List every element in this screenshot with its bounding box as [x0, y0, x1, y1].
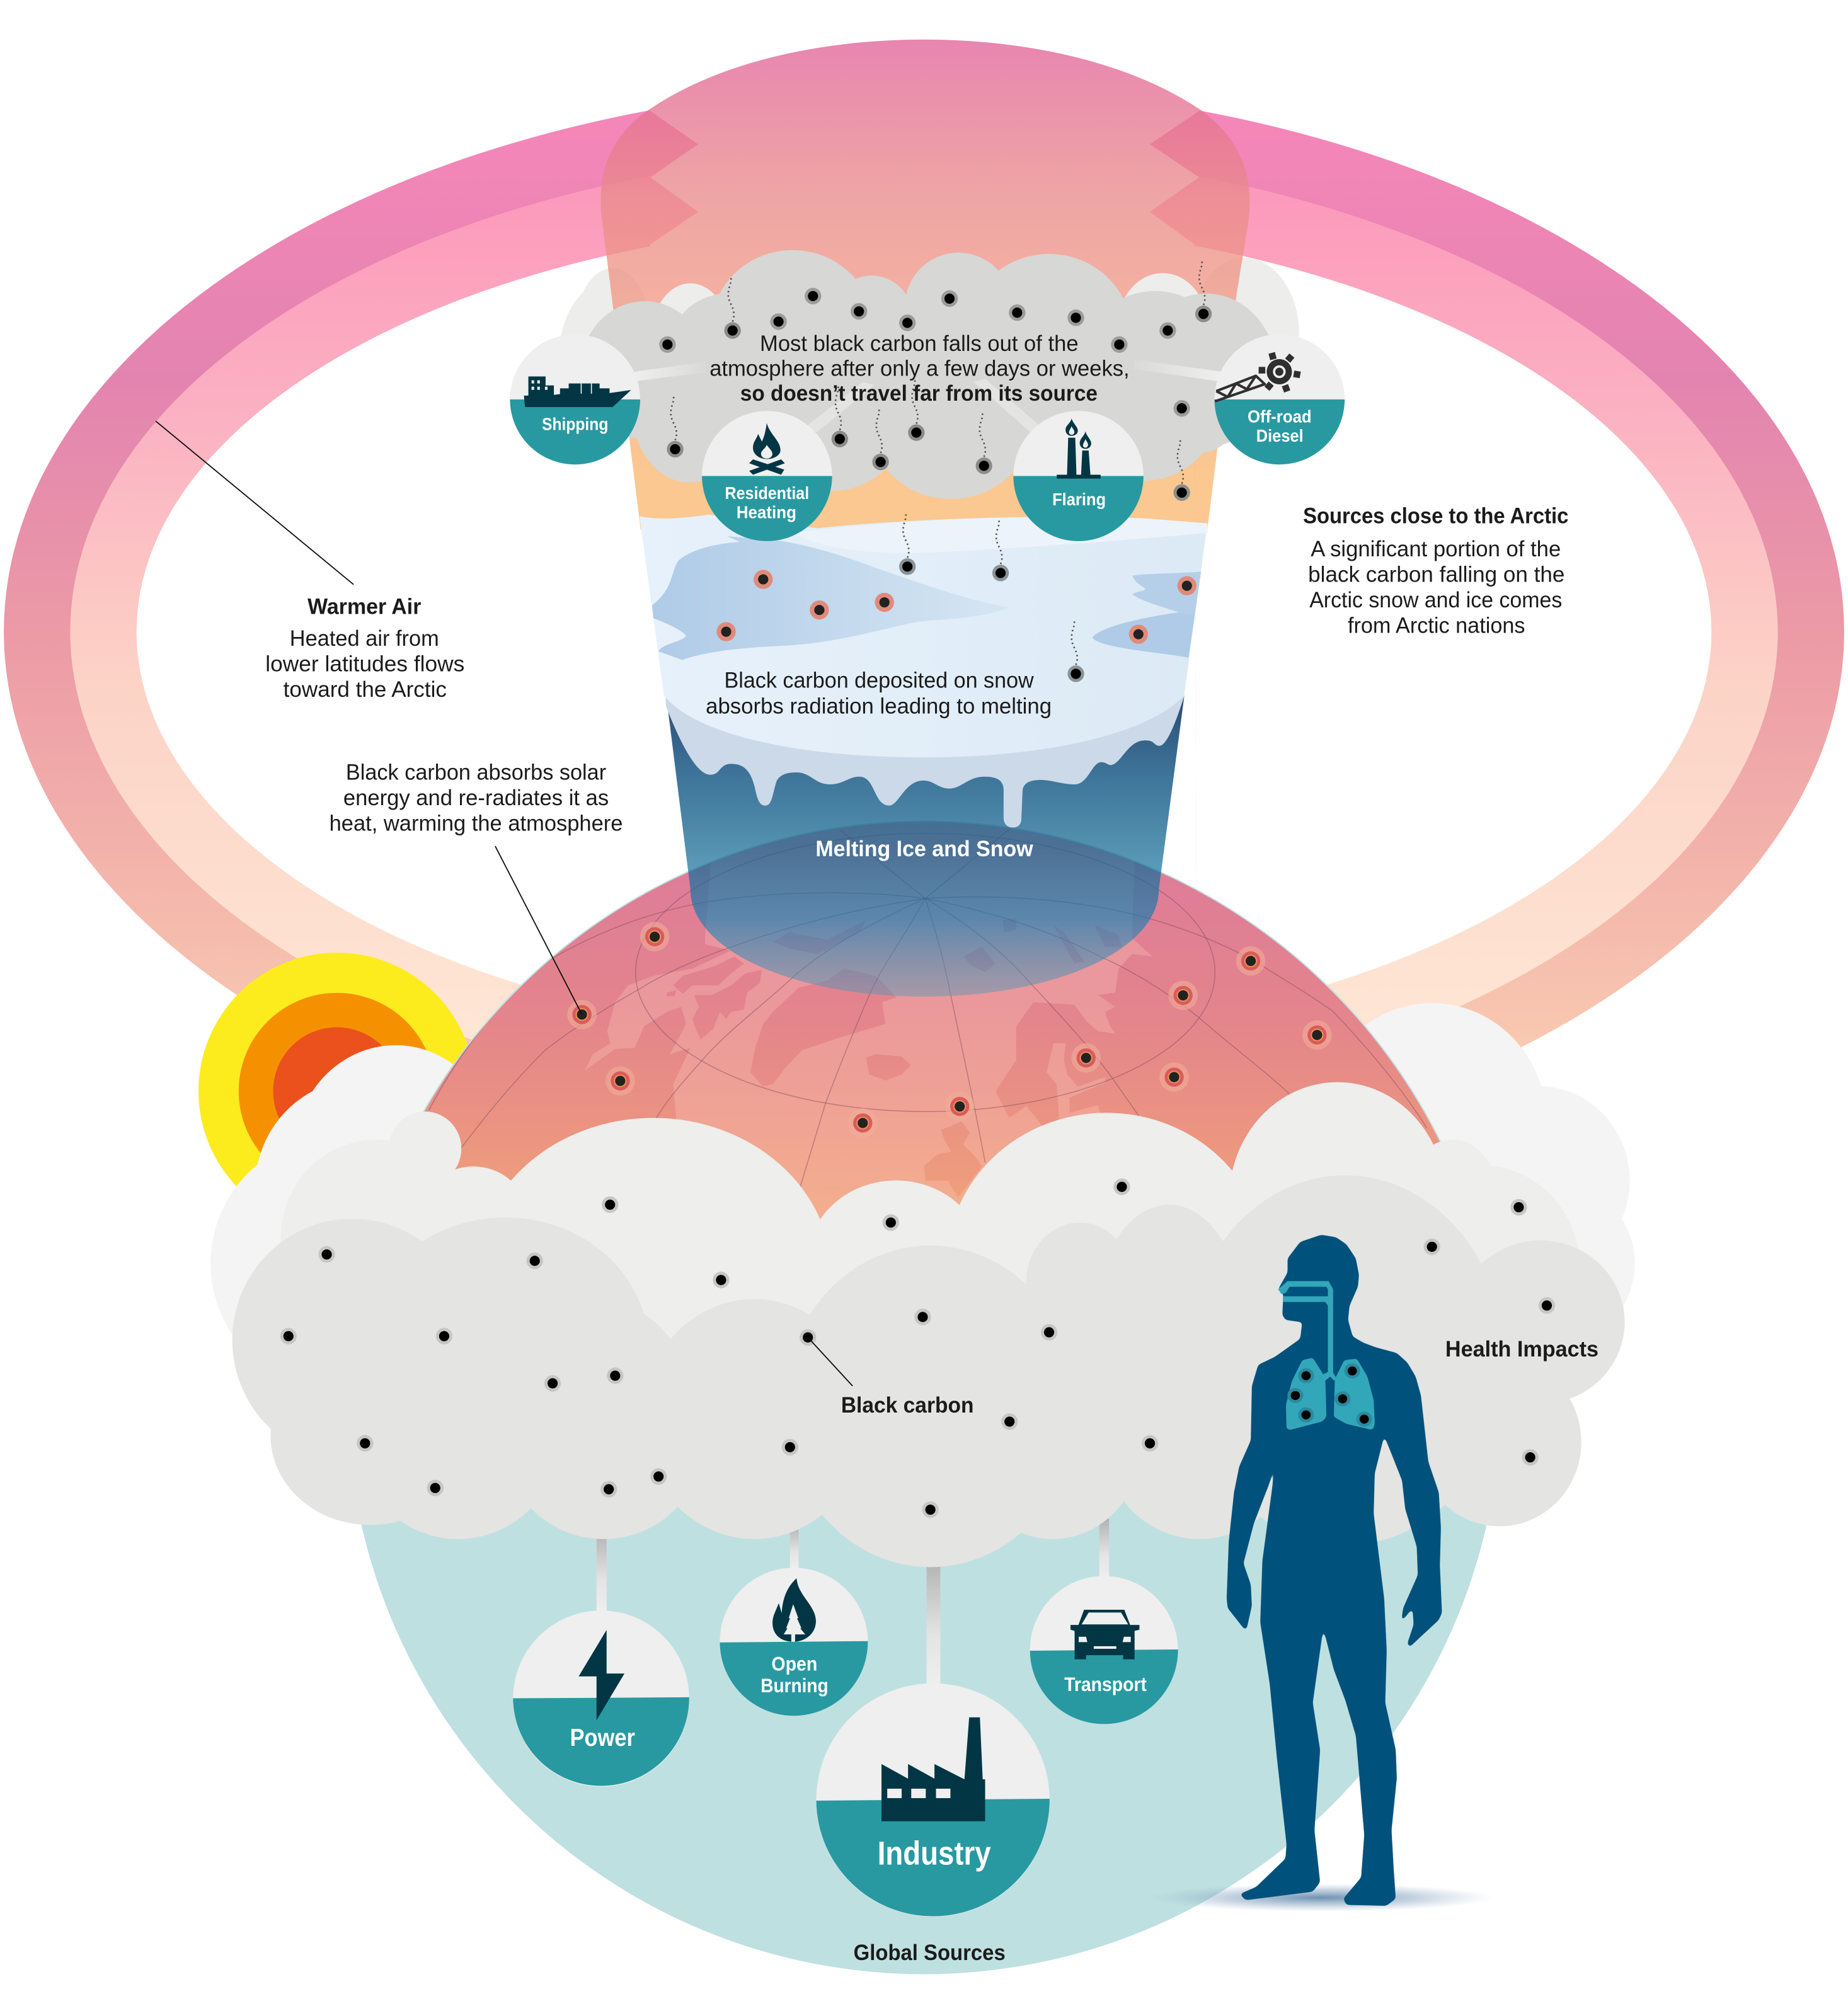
column: warmer air dome and haze	[600, 40, 1249, 530]
source: industry	[817, 1683, 1050, 1917]
source: power: Power	[570, 1724, 635, 1752]
callout: sources close to the arctic: A significant portion of the	[1311, 536, 1561, 561]
source: flaring: Flaring	[1052, 490, 1106, 509]
carbon particles on snow	[716, 512, 1197, 682]
icon: ship	[524, 377, 631, 407]
text: snow deposition: Black carbon deposited on snow	[725, 668, 1034, 693]
airway	[1278, 1281, 1337, 1381]
callout: solar energy absorption: heat, warming the atmosphere	[330, 811, 623, 836]
text: snow deposition	[706, 668, 1052, 718]
text: falls out of the atmosphere: so doesn’t travel far from its source	[740, 381, 1098, 406]
source: shipping: Shipping	[542, 415, 608, 434]
callout: sources close to the arctic: from Arctic nations	[1348, 613, 1525, 638]
source: flaring	[1011, 411, 1146, 546]
front cloud puffs	[581, 250, 1277, 499]
text: falls out of the atmosphere: atmosphere after only a few days or weeks,	[709, 356, 1130, 381]
carbon in lungs	[1287, 1363, 1372, 1426]
source: open burning: Burning	[760, 1675, 829, 1697]
lungs	[1286, 1358, 1375, 1430]
baltic sea	[1047, 1043, 1105, 1120]
icon: excavator wheel	[1215, 352, 1301, 401]
callout: warmer air: lower latitudes flows	[265, 651, 464, 676]
connectors to global sources	[597, 1518, 1109, 1686]
callout: sources close to the arctic: black carbon falling on the	[1308, 562, 1564, 587]
callout: warmer air	[156, 421, 464, 702]
icon: sun	[198, 953, 476, 1230]
global clouds	[232, 1082, 1625, 1686]
connectors to arctic sources	[634, 359, 1221, 433]
icicle drips	[664, 665, 1184, 827]
text: falls out of the atmosphere: Most black carbon falls out of the	[760, 331, 1079, 356]
carbon particles in global cloud	[280, 1179, 1555, 1518]
back cloud puffs	[652, 273, 1207, 386]
global sources teal disc	[347, 820, 1501, 1974]
source: residential heating: Residential	[725, 483, 809, 503]
shaded snow right lower	[1092, 612, 1195, 658]
source: transport	[1030, 1576, 1178, 1724]
callout: solar energy absorption: energy and re-radiates it as	[343, 785, 609, 810]
source: residential heating: Heating	[737, 502, 796, 522]
snow disc	[640, 515, 1207, 757]
latitude and longitude lines	[429, 827, 1427, 1187]
source: residential heating	[699, 411, 835, 546]
snow and ice section	[640, 515, 1207, 827]
icon: factory	[881, 1717, 985, 1821]
callout: sources close to the arctic: Sources close to the Arctic	[1303, 503, 1568, 528]
source: power	[513, 1610, 689, 1787]
icon: lightning bolt	[578, 1630, 624, 1720]
source: transport: Transport	[1064, 1673, 1147, 1695]
callout: sources close to the arctic	[1303, 503, 1568, 638]
source: shipping	[508, 335, 642, 469]
callout: warmer air: toward the Arctic	[284, 677, 447, 702]
light snow band	[793, 517, 1207, 553]
arctic hemisphere	[425, 822, 1440, 1220]
human figure	[1227, 1235, 1442, 1906]
icon: car	[1070, 1610, 1139, 1660]
source: off-road diesel: Off-road	[1248, 406, 1312, 426]
source: open burning: Open	[771, 1653, 817, 1675]
label: health impacts: Health Impacts	[1445, 1336, 1598, 1362]
shaded snow right	[1132, 571, 1201, 615]
globe	[345, 817, 1506, 1974]
land masses	[345, 817, 1506, 1289]
ocean on map	[585, 890, 1152, 1220]
callout: black carbon: Black carbon	[841, 1392, 973, 1418]
icon: campfire	[749, 423, 785, 474]
source: industry: Industry	[878, 1835, 991, 1872]
shadow under figure	[1149, 1884, 1493, 1912]
callout: warmer air: Heated air from	[290, 626, 439, 651]
text: falls out of the atmosphere	[709, 331, 1130, 406]
heading: melting ice and snow: Melting Ice and Snow	[815, 836, 1033, 861]
source: off-road diesel: Diesel	[1256, 426, 1304, 445]
column: melting ice dark section	[666, 696, 1185, 997]
middle cloud layer	[281, 1082, 1579, 1435]
carbon particles in arctic cloud	[659, 259, 1212, 501]
icon: burning tree	[772, 1578, 816, 1642]
shaded snow left	[652, 536, 1010, 660]
carbon particles on globe	[567, 922, 1332, 1138]
text: snow deposition: absorbs radiation leading to melting	[706, 693, 1052, 718]
arctic clouds	[581, 250, 1277, 499]
front cloud layer	[232, 1175, 1625, 1567]
warm air ring	[4, 110, 1844, 1047]
callout: black carbon	[808, 1338, 973, 1418]
body silhouette	[1227, 1235, 1442, 1906]
source: off-road diesel	[1212, 335, 1348, 469]
callout: sources close to the arctic: Arctic snow and ice comes	[1309, 587, 1562, 612]
arctic cloud: outer back puffs	[559, 258, 1299, 434]
callout: solar energy absorption	[330, 760, 623, 1014]
global clouds: back layer	[210, 1003, 1635, 1391]
callout: solar energy absorption: Black carbon absorbs solar	[346, 760, 606, 785]
callout: warmer air: Warmer Air	[307, 593, 422, 619]
icon: flare stacks	[1057, 418, 1101, 479]
label: global sources: Global Sources	[854, 1940, 1006, 1965]
source: open burning	[720, 1568, 868, 1716]
